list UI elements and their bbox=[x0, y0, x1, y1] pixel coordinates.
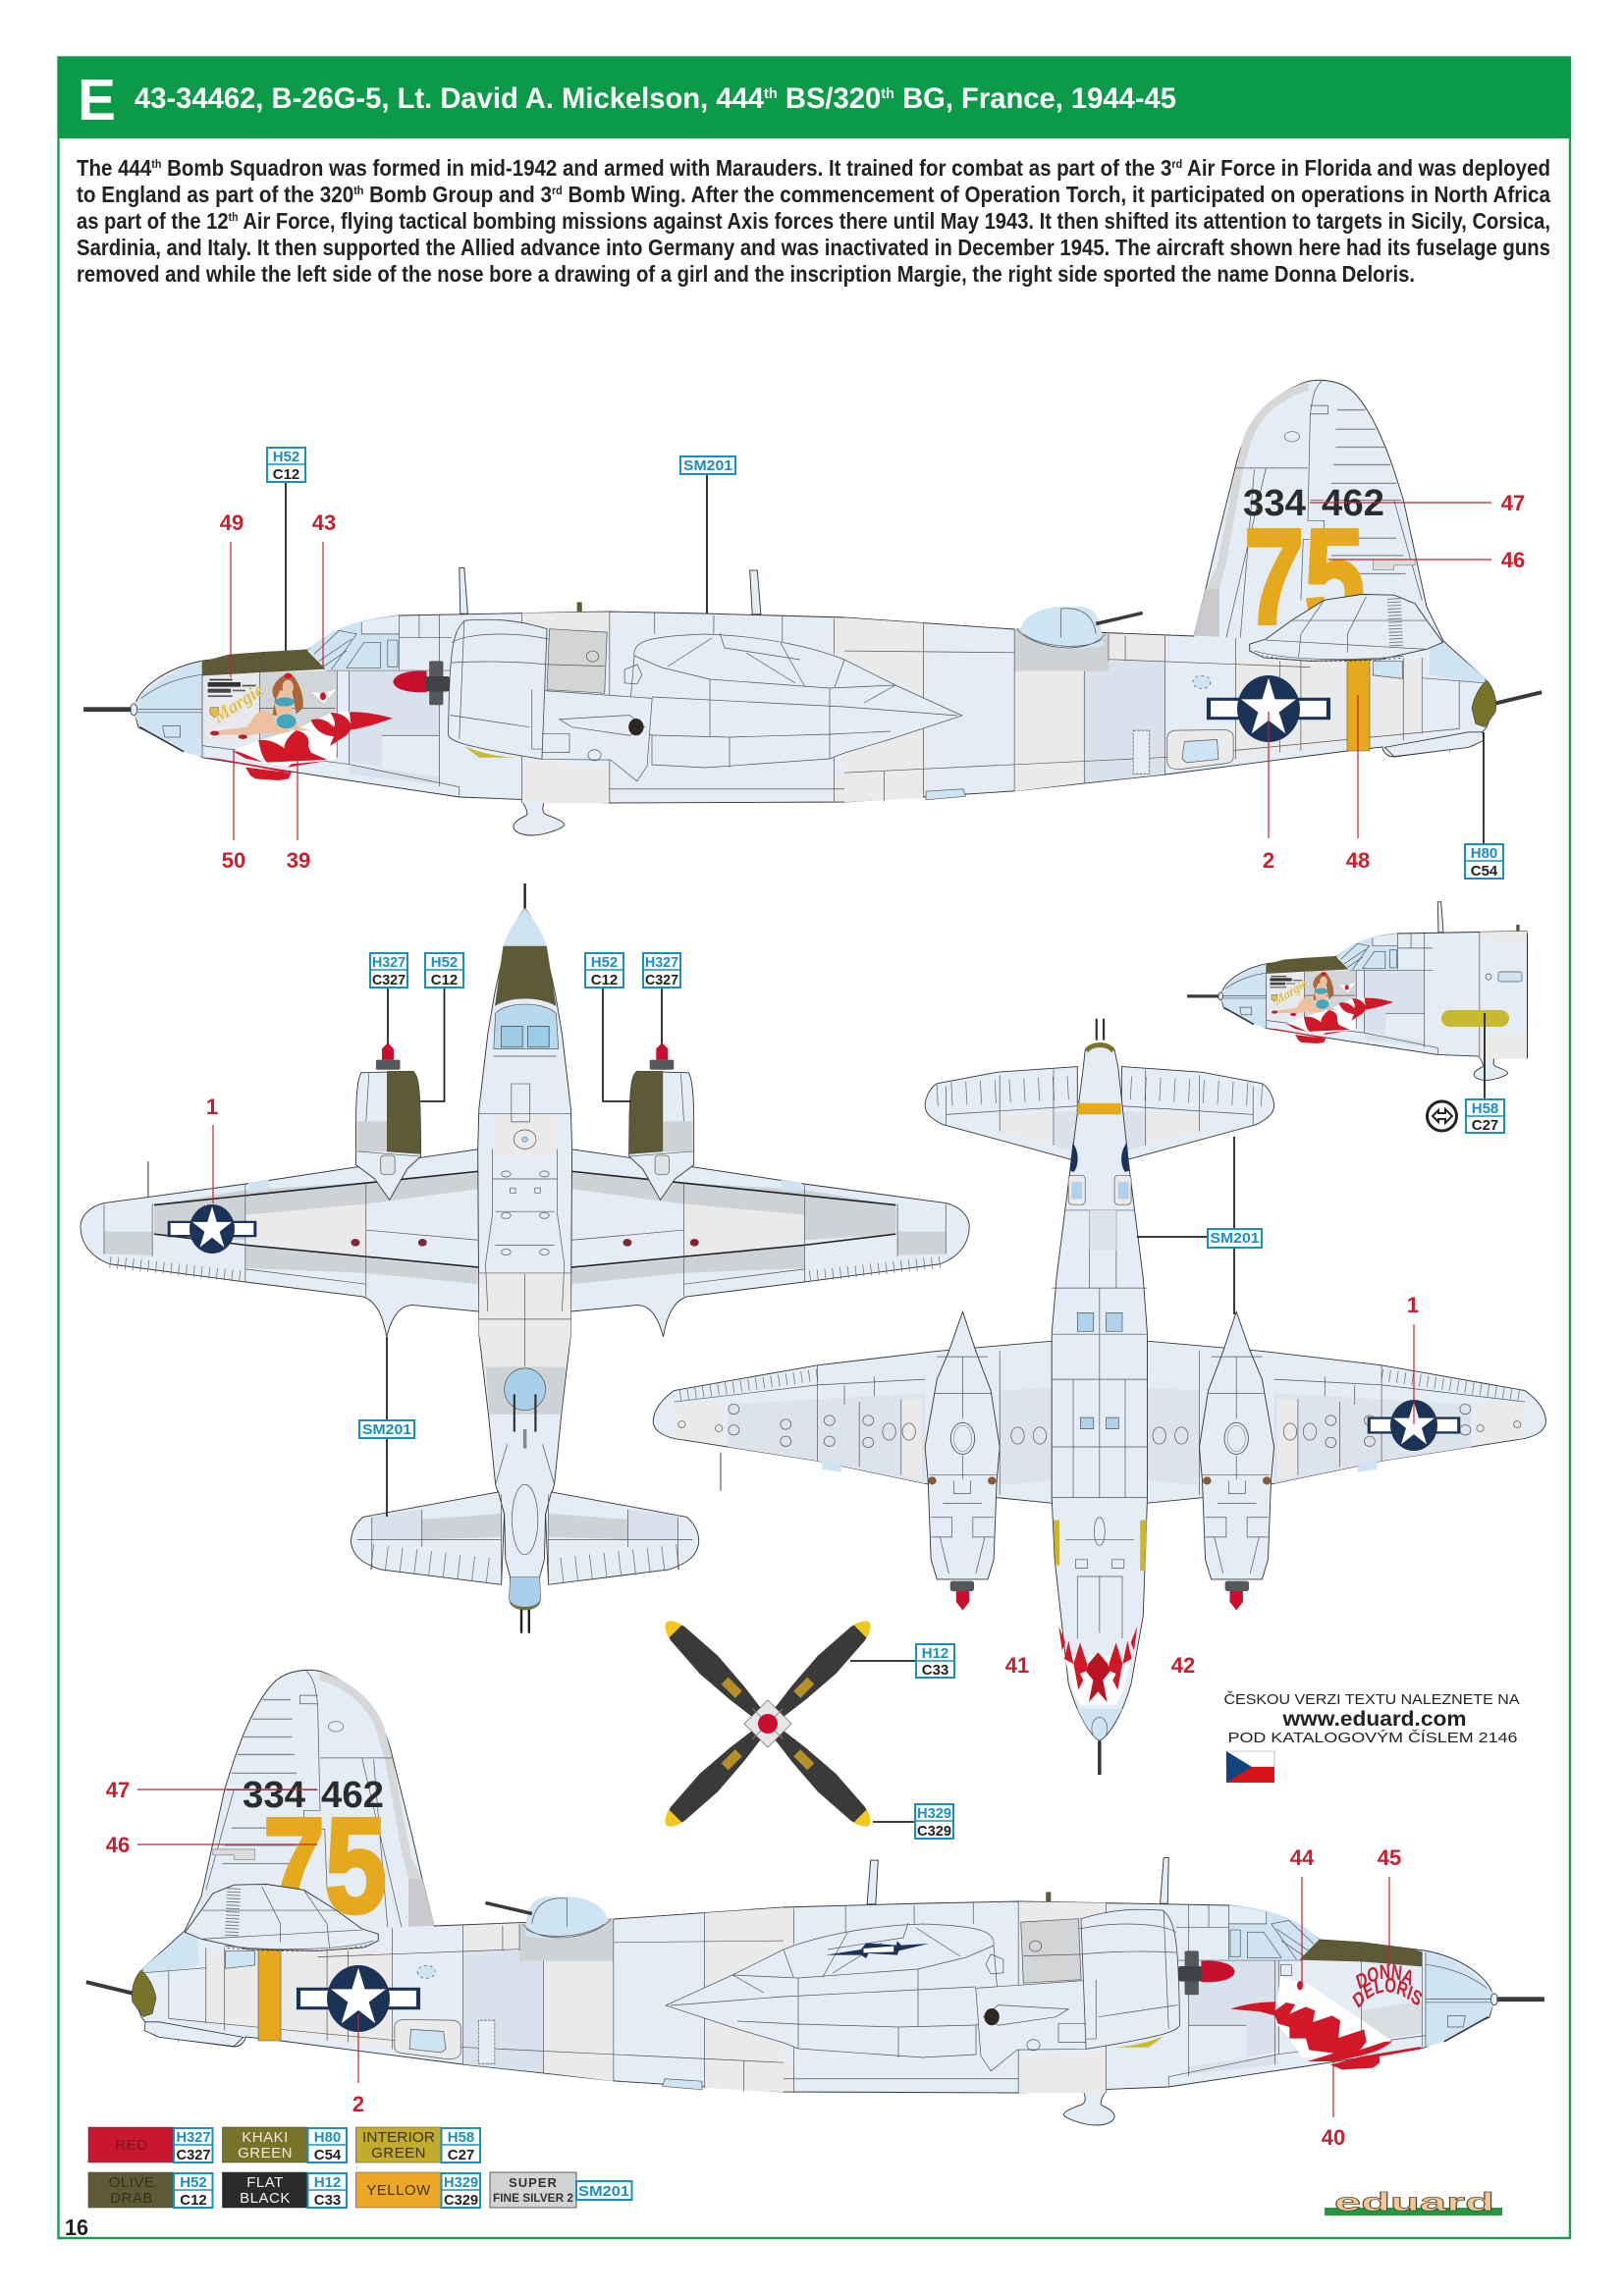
swatch flat black: C33 bbox=[314, 2192, 341, 2209]
number 1 underside bbox=[1407, 1293, 1419, 1424]
tail code 75 right: 75 bbox=[263, 1789, 387, 1942]
paint label SM201 top: SM201 bbox=[683, 457, 732, 474]
paint label H52 C12: C12 bbox=[273, 466, 299, 483]
underside tailplane bbox=[925, 1067, 1077, 1159]
callout lines and numbers, left profile: 43 bbox=[312, 510, 336, 535]
title: BG, France, 1944-45 bbox=[894, 82, 1176, 115]
description text: th bbox=[151, 157, 161, 171]
title: 43-34462, B-26G-5, Lt. David A. Mickelson, 444 bbox=[135, 82, 782, 115]
callout lines and numbers, left profile: 39 bbox=[287, 848, 310, 873]
swatch yellow bbox=[355, 2172, 480, 2209]
Czech note: www.eduard.com bbox=[1281, 1708, 1467, 1731]
paint labels propeller bbox=[850, 1644, 954, 1840]
tail serial number right: 462 bbox=[321, 1775, 384, 1816]
swatch olive drab: C12 bbox=[180, 2192, 207, 2209]
description text: rd bbox=[552, 184, 563, 197]
paint label SM201 underside: SM201 bbox=[1210, 1230, 1259, 1247]
top view wing insignia bbox=[168, 1204, 256, 1254]
tail turret bbox=[509, 1577, 541, 1607]
paint label SM201 underside bbox=[1137, 1137, 1262, 1314]
swatch flat black bbox=[222, 2172, 347, 2209]
description text: removed and while the left side of the nose bore a drawing of a girl and the inscription Margie, the right side sported the name Donna Deloris. bbox=[77, 261, 1415, 287]
Czech note: POD KATALOGOVÝM ČÍSLEM 2146 bbox=[1227, 1730, 1518, 1746]
tail serial number: 334 bbox=[1243, 483, 1306, 524]
fuselage bbox=[478, 909, 572, 1610]
paint labels top view: H52 bbox=[591, 954, 618, 971]
swatch khaki green: GREEN bbox=[238, 2145, 293, 2162]
title: BS/320 bbox=[778, 82, 881, 115]
paint label H52 C12: H52 bbox=[273, 449, 299, 465]
inset nose art bbox=[1267, 956, 1393, 1043]
nose inset view bbox=[1187, 901, 1528, 1081]
title: th bbox=[881, 85, 894, 102]
callout lines and numbers, right profile: 2 bbox=[352, 2092, 364, 2116]
underside nose flames bbox=[1058, 1627, 1137, 1705]
paint labels top view: C12 bbox=[431, 972, 458, 988]
swatch khaki green: KHAKI bbox=[242, 2129, 289, 2146]
callout lines and numbers, right profile: 40 bbox=[1322, 2125, 1345, 2150]
Czech note: ČESKOU VERZI TEXTU NALEZNETE NA bbox=[1223, 1691, 1520, 1708]
callout lines and numbers, left profile: 46 bbox=[1501, 548, 1525, 572]
tail serial number: 462 bbox=[1322, 483, 1384, 524]
swatch interior green: C27 bbox=[448, 2147, 474, 2163]
description text: as part of the 12 bbox=[77, 208, 249, 234]
swatch interior green: H58 bbox=[448, 2129, 474, 2146]
swatch olive drab: OLIVE bbox=[109, 2174, 154, 2191]
swatch olive drab bbox=[88, 2172, 213, 2209]
paint labels top view: H327 bbox=[372, 954, 406, 971]
paint labels propeller: C329 bbox=[917, 1823, 951, 1840]
paint label H80 C54: C54 bbox=[1471, 863, 1498, 880]
swatch super fine silver: SUPER bbox=[509, 2175, 558, 2190]
paint label SM201 top bbox=[680, 456, 735, 614]
profile letter: E bbox=[78, 68, 116, 133]
swatch flat black: H12 bbox=[314, 2174, 341, 2191]
tail code 75: 75 bbox=[1244, 502, 1365, 653]
swatch yellow: H329 bbox=[444, 2174, 478, 2191]
callout lines and numbers, left profile: 49 bbox=[220, 510, 244, 535]
callout lines and numbers, right profile: 45 bbox=[1378, 1845, 1401, 1870]
dorsal turret bbox=[505, 1368, 546, 1411]
swatch red bbox=[88, 2127, 213, 2163]
number 1 top view: 1 bbox=[206, 1095, 218, 1119]
paint labels top view: H52 bbox=[431, 954, 458, 971]
callout lines and numbers, left profile: 2 bbox=[1263, 848, 1274, 873]
tailplane bbox=[352, 1492, 505, 1584]
colour legend bbox=[88, 2127, 632, 2209]
left side profile view bbox=[83, 380, 1542, 835]
paint labels top view: C12 bbox=[591, 972, 618, 988]
paint labels propeller: H12 bbox=[922, 1645, 948, 1662]
description text: Bomb Group and 3 bbox=[363, 182, 552, 207]
callout lines and numbers, right profile: 47 bbox=[106, 1778, 130, 1802]
swatch khaki green: H80 bbox=[314, 2129, 341, 2146]
top view aircraft bbox=[81, 883, 969, 1633]
title: th bbox=[764, 85, 778, 102]
swatch interior green bbox=[355, 2127, 480, 2163]
description text: to England as part of the 320 bbox=[77, 182, 385, 207]
national insignia right bbox=[297, 1965, 420, 2032]
inscription Deloris: DELORIS bbox=[1352, 1978, 1422, 2008]
tail serial number bbox=[1243, 483, 1384, 524]
swatch yellow: YELLOW bbox=[366, 2182, 431, 2199]
description text: The 444 bbox=[77, 155, 161, 181]
paint labels top view: H327 bbox=[645, 954, 678, 971]
paint label H80 C54: H80 bbox=[1471, 845, 1497, 862]
swatch red: H327 bbox=[177, 2129, 210, 2146]
description text: th bbox=[229, 210, 238, 224]
callout lines and numbers, left profile: 50 bbox=[222, 848, 245, 873]
nose art Margie bbox=[202, 650, 393, 780]
paint labels top view: SM201 bbox=[362, 1421, 411, 1438]
swatch interior green: INTERIOR bbox=[362, 2129, 435, 2146]
description text: th bbox=[353, 184, 363, 197]
underside wing with nacelle bbox=[653, 1311, 1054, 1610]
swatch flat black: BLACK bbox=[240, 2190, 291, 2207]
paint labels top view: C327 bbox=[372, 972, 406, 988]
callout lines and numbers, left profile: 47 bbox=[1501, 491, 1525, 515]
description text: Air Force in Florida and was deployed bbox=[1182, 155, 1550, 181]
swatch interior green: GREEN bbox=[371, 2145, 426, 2162]
swatch olive drab: DRAB bbox=[110, 2190, 153, 2207]
swatch super fine silver: SM201 bbox=[578, 2183, 629, 2200]
icon: view direction arrow bbox=[1428, 1101, 1457, 1131]
underside fuselage bbox=[1052, 1043, 1148, 1741]
nose art Donna Deloris bbox=[1230, 1940, 1422, 2069]
description text: Bomb Squadron was formed in mid-1942 and armed with Marauders. It trained for combat as part of the 3 bbox=[161, 155, 1171, 181]
paint label H58 C27: C27 bbox=[1472, 1117, 1498, 1134]
swatch red: C327 bbox=[177, 2147, 210, 2163]
callout lines and numbers, right profile: 46 bbox=[106, 1833, 130, 1857]
header band bbox=[58, 57, 1571, 138]
tail serial number right: 334 bbox=[243, 1775, 305, 1816]
numbers 41 42: 42 bbox=[1171, 1653, 1195, 1678]
paint labels propeller: C33 bbox=[922, 1662, 948, 1679]
tail serial number right bbox=[243, 1775, 384, 1816]
callout lines and numbers, right profile: 44 bbox=[1290, 1845, 1315, 1870]
paint labels propeller: H329 bbox=[917, 1805, 951, 1822]
left wing bbox=[81, 1042, 481, 1337]
callout lines and numbers, right profile bbox=[106, 1778, 1401, 2150]
paint label H58 C27: H58 bbox=[1472, 1100, 1498, 1117]
swatch khaki green: C54 bbox=[314, 2147, 342, 2163]
paint labels top view: C327 bbox=[645, 972, 678, 988]
paint label H80 C54 bbox=[1465, 732, 1503, 880]
right side profile view bbox=[85, 1669, 1544, 2126]
swatch super fine silver: FINE SILVER 2 bbox=[493, 2191, 573, 2205]
swatch yellow: C329 bbox=[444, 2192, 478, 2209]
paint labels top view bbox=[359, 953, 680, 1517]
description text bbox=[77, 155, 1550, 287]
swatch super fine silver bbox=[490, 2172, 632, 2208]
Czech note bbox=[1223, 1691, 1520, 1783]
inset interior green oval and details bbox=[1441, 933, 1528, 1058]
paint label H58 C27 bbox=[1466, 1013, 1504, 1134]
description text: rd bbox=[1171, 157, 1182, 171]
swatch flat black: FLAT bbox=[246, 2174, 284, 2191]
eduard logo bbox=[1325, 2187, 1502, 2216]
numbers 41 42 bbox=[1005, 1653, 1195, 1678]
propeller bbox=[658, 1614, 878, 1834]
page number: 16 bbox=[65, 2215, 88, 2240]
underside view aircraft bbox=[653, 1019, 1545, 1775]
wing insignia glimpse bbox=[826, 1941, 929, 1958]
eduard logo: eduard bbox=[1334, 2187, 1494, 2216]
paint label H52 C12 bbox=[267, 448, 305, 651]
national insignia bbox=[1207, 675, 1330, 742]
Czech flag bbox=[1226, 1751, 1274, 1783]
callout lines and numbers, left profile bbox=[220, 491, 1525, 873]
swatch red: RED bbox=[115, 2137, 148, 2154]
number 1 underside: 1 bbox=[1407, 1293, 1419, 1317]
swatch khaki green bbox=[222, 2127, 347, 2163]
callout lines and numbers, left profile: 48 bbox=[1346, 848, 1370, 873]
underside wing insignia bbox=[1368, 1400, 1460, 1451]
numbers 41 42: 41 bbox=[1005, 1653, 1029, 1678]
number 1 top view bbox=[206, 1095, 218, 1203]
inscription Donna: DONNA bbox=[1355, 1963, 1412, 1989]
swatch olive drab: H52 bbox=[180, 2174, 207, 2191]
